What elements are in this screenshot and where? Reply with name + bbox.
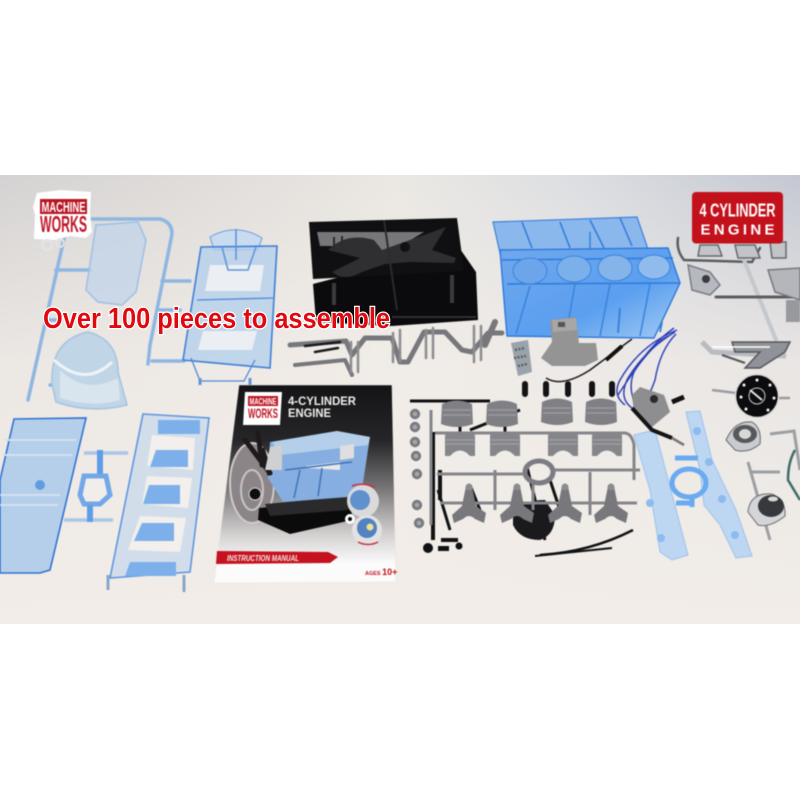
manual callout gears [345, 484, 382, 545]
headline caption: Over 100 pieces to assemble [43, 303, 390, 335]
clear blue sprue: left frame [28, 219, 190, 400]
blue wire bundle [617, 328, 677, 410]
manual red banner: INSTRUCTION MANUAL [227, 554, 299, 563]
chrome sprue parts [678, 238, 800, 340]
manual red banner [216, 551, 338, 564]
manual logo: MACHINE [250, 396, 276, 408]
part: tray cover [86, 222, 146, 305]
manual logo: WORKS [248, 405, 278, 421]
product name badge: ENGINE [700, 222, 774, 238]
part: domed cover [52, 332, 127, 409]
clear blue sprue: rack parts [108, 414, 209, 592]
clear blue tray: lower left [0, 418, 86, 573]
product name badge [692, 192, 783, 244]
brand logo: MACHINE [42, 199, 86, 216]
photo background [0, 175, 800, 624]
black and gray parts sprue: pistons [410, 384, 640, 556]
instruction manual [214, 385, 397, 583]
clear blue ring sprues [634, 411, 752, 560]
manual title: ENGINE [288, 408, 331, 420]
electric motor with wire [541, 317, 632, 382]
bag of screws [511, 340, 532, 376]
black gauge dial [712, 374, 790, 418]
manual age label: AGES 10+ [365, 567, 397, 577]
black display base [309, 218, 478, 326]
clear blue panel: upper middle [183, 229, 277, 386]
brand logo: WORKS [40, 211, 87, 237]
manual logo [243, 392, 282, 425]
brand logo [33, 190, 92, 250]
clear blue link part [64, 450, 128, 522]
chrome caps and sprue [726, 422, 800, 540]
switch and jack plug [632, 387, 684, 445]
manual title: 4-CYLINDER [288, 396, 357, 408]
clear blue engine block [493, 217, 680, 338]
gray crankshaft sprue [290, 322, 502, 375]
chrome rocker cover [702, 342, 790, 368]
manual engine illustration [230, 431, 370, 534]
